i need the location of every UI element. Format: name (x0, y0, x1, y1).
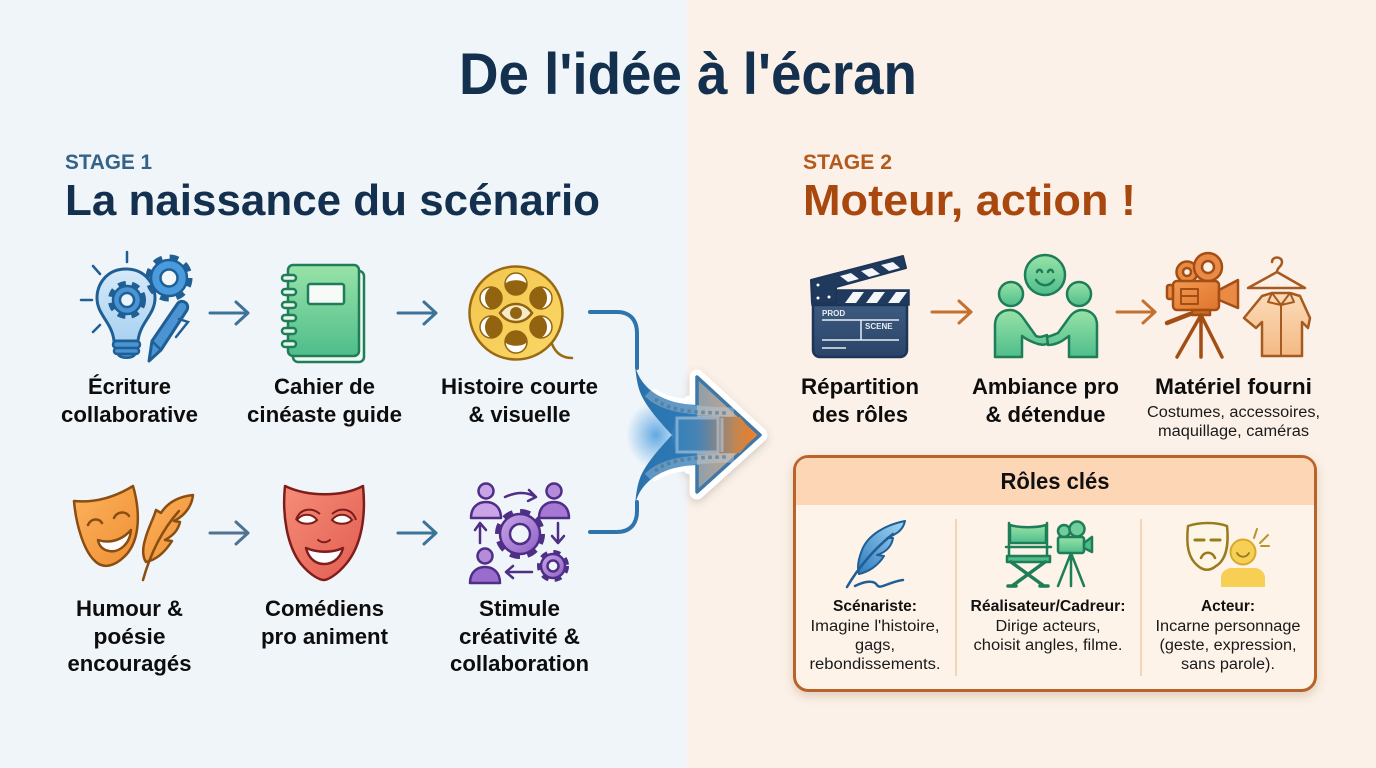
label: histoire courte et visuelle (441, 374, 598, 427)
icon: clapperboard: SCENE (865, 322, 893, 331)
label: humour et poésie encouragés: Humour & (76, 596, 183, 621)
label: écriture collaborative: Écriture (88, 374, 171, 399)
stage 2 label: STAGE 2 (803, 151, 892, 174)
text: acteur: Incarne personnage (1156, 618, 1300, 635)
label: comédiens pro animent: pro animent (261, 624, 389, 649)
arrow (398, 522, 436, 544)
icon: orange mask and feather (74, 486, 193, 580)
stage 2 heading: Moteur, action ! (803, 176, 1136, 225)
icon: hanger and shirt (1244, 258, 1310, 356)
panel: rôles clés (794, 456, 1316, 690)
arrow (398, 302, 436, 324)
text: scénariste: Scénariste: (833, 598, 917, 615)
label: humour et poésie encouragés: encouragés (68, 651, 192, 676)
stage 1 label: STAGE 1 (65, 151, 152, 174)
panel: right background (687, 0, 1376, 768)
label: comédiens pro animent (261, 596, 389, 649)
text: acteur (1156, 598, 1300, 673)
icon: director chair and camera (1006, 522, 1092, 586)
label: comédiens pro animent: Comédiens (265, 596, 384, 621)
text: réalisateur cadreur: Dirige acteurs, (996, 618, 1100, 635)
text: acteur: (geste, expression, (1160, 637, 1296, 654)
label: répartition des rôles (801, 374, 919, 427)
label: histoire courte et visuelle: & visuelle (468, 402, 570, 427)
text: scénariste: gags, (855, 637, 895, 654)
icon: golden film reel with eye (470, 266, 572, 360)
panel: left background (0, 0, 687, 768)
label: stimule créativité et collaboration (450, 596, 589, 676)
label: histoire courte et visuelle: Histoire courte (441, 374, 598, 399)
label: ambiance pro et détendue: & détendue (986, 402, 1106, 427)
icon: mask and actor (1187, 523, 1269, 587)
label: matériel fourni (1147, 374, 1320, 440)
label: écriture collaborative: collaborative (61, 402, 198, 427)
label: matériel fourni: maquillage, caméras (1158, 423, 1309, 440)
arrow (210, 522, 248, 544)
label: humour et poésie encouragés: poésie (94, 624, 166, 649)
text: acteur: Acteur: (1201, 598, 1255, 615)
text: scénariste: rebondissements. (810, 656, 940, 673)
label: stimule créativité et collaboration: créativité & (459, 624, 580, 649)
arrow: merging film-strip arrow (590, 312, 760, 532)
arrow (932, 301, 971, 323)
stage 1 heading: La naissance du scénario (65, 176, 600, 225)
label: répartition des rôles: des rôles (812, 402, 908, 427)
icon: blue quill (847, 521, 905, 587)
text: réalisateur cadreur: Réalisateur/Cadreur: (970, 598, 1126, 615)
text: réalisateur cadreur: choisit angles, filme. (974, 637, 1122, 654)
label: cahier de cinéaste guide: Cahier de (274, 374, 375, 399)
label: stimule créativité et collaboration: Stimule (479, 596, 560, 621)
icon: movie camera on tripod (1167, 253, 1238, 357)
arrow (210, 302, 248, 324)
label: ambiance pro et détendue (972, 374, 1119, 427)
label: écriture collaborative (61, 374, 198, 427)
label: matériel fourni: Matériel fourni (1155, 374, 1312, 399)
label: répartition des rôles: Répartition (801, 374, 919, 399)
icon: red comedy mask (284, 486, 364, 580)
text: réalisateur cadreur (970, 598, 1126, 654)
heading: rôles clés: Rôles clés (1000, 468, 1110, 494)
label: humour et poésie encouragés (68, 596, 192, 676)
label: stimule créativité et collaboration: collaboration (450, 651, 589, 676)
icon: lightbulb with gears and pen (81, 252, 188, 361)
label: ambiance pro et détendue: Ambiance pro (972, 374, 1119, 399)
arrow (1117, 301, 1155, 323)
label: matériel fourni: Costumes, accessoires, (1147, 404, 1320, 421)
text: acteur: sans parole). (1181, 656, 1275, 673)
label: cahier de cinéaste guide: cinéaste guide (247, 402, 402, 427)
text: scénariste: Imagine l'histoire, (810, 618, 940, 635)
text: scénariste (810, 598, 940, 673)
icon: handshake and smiling face (995, 255, 1097, 357)
icon: collaboration people and gears (470, 484, 569, 583)
icon: green notebook (282, 265, 364, 362)
icon: clapperboard: PROD (822, 309, 845, 318)
label: cahier de cinéaste guide (247, 374, 402, 427)
title: De l'idée à l'écran (459, 42, 917, 107)
icon: clapperboard (811, 256, 909, 357)
